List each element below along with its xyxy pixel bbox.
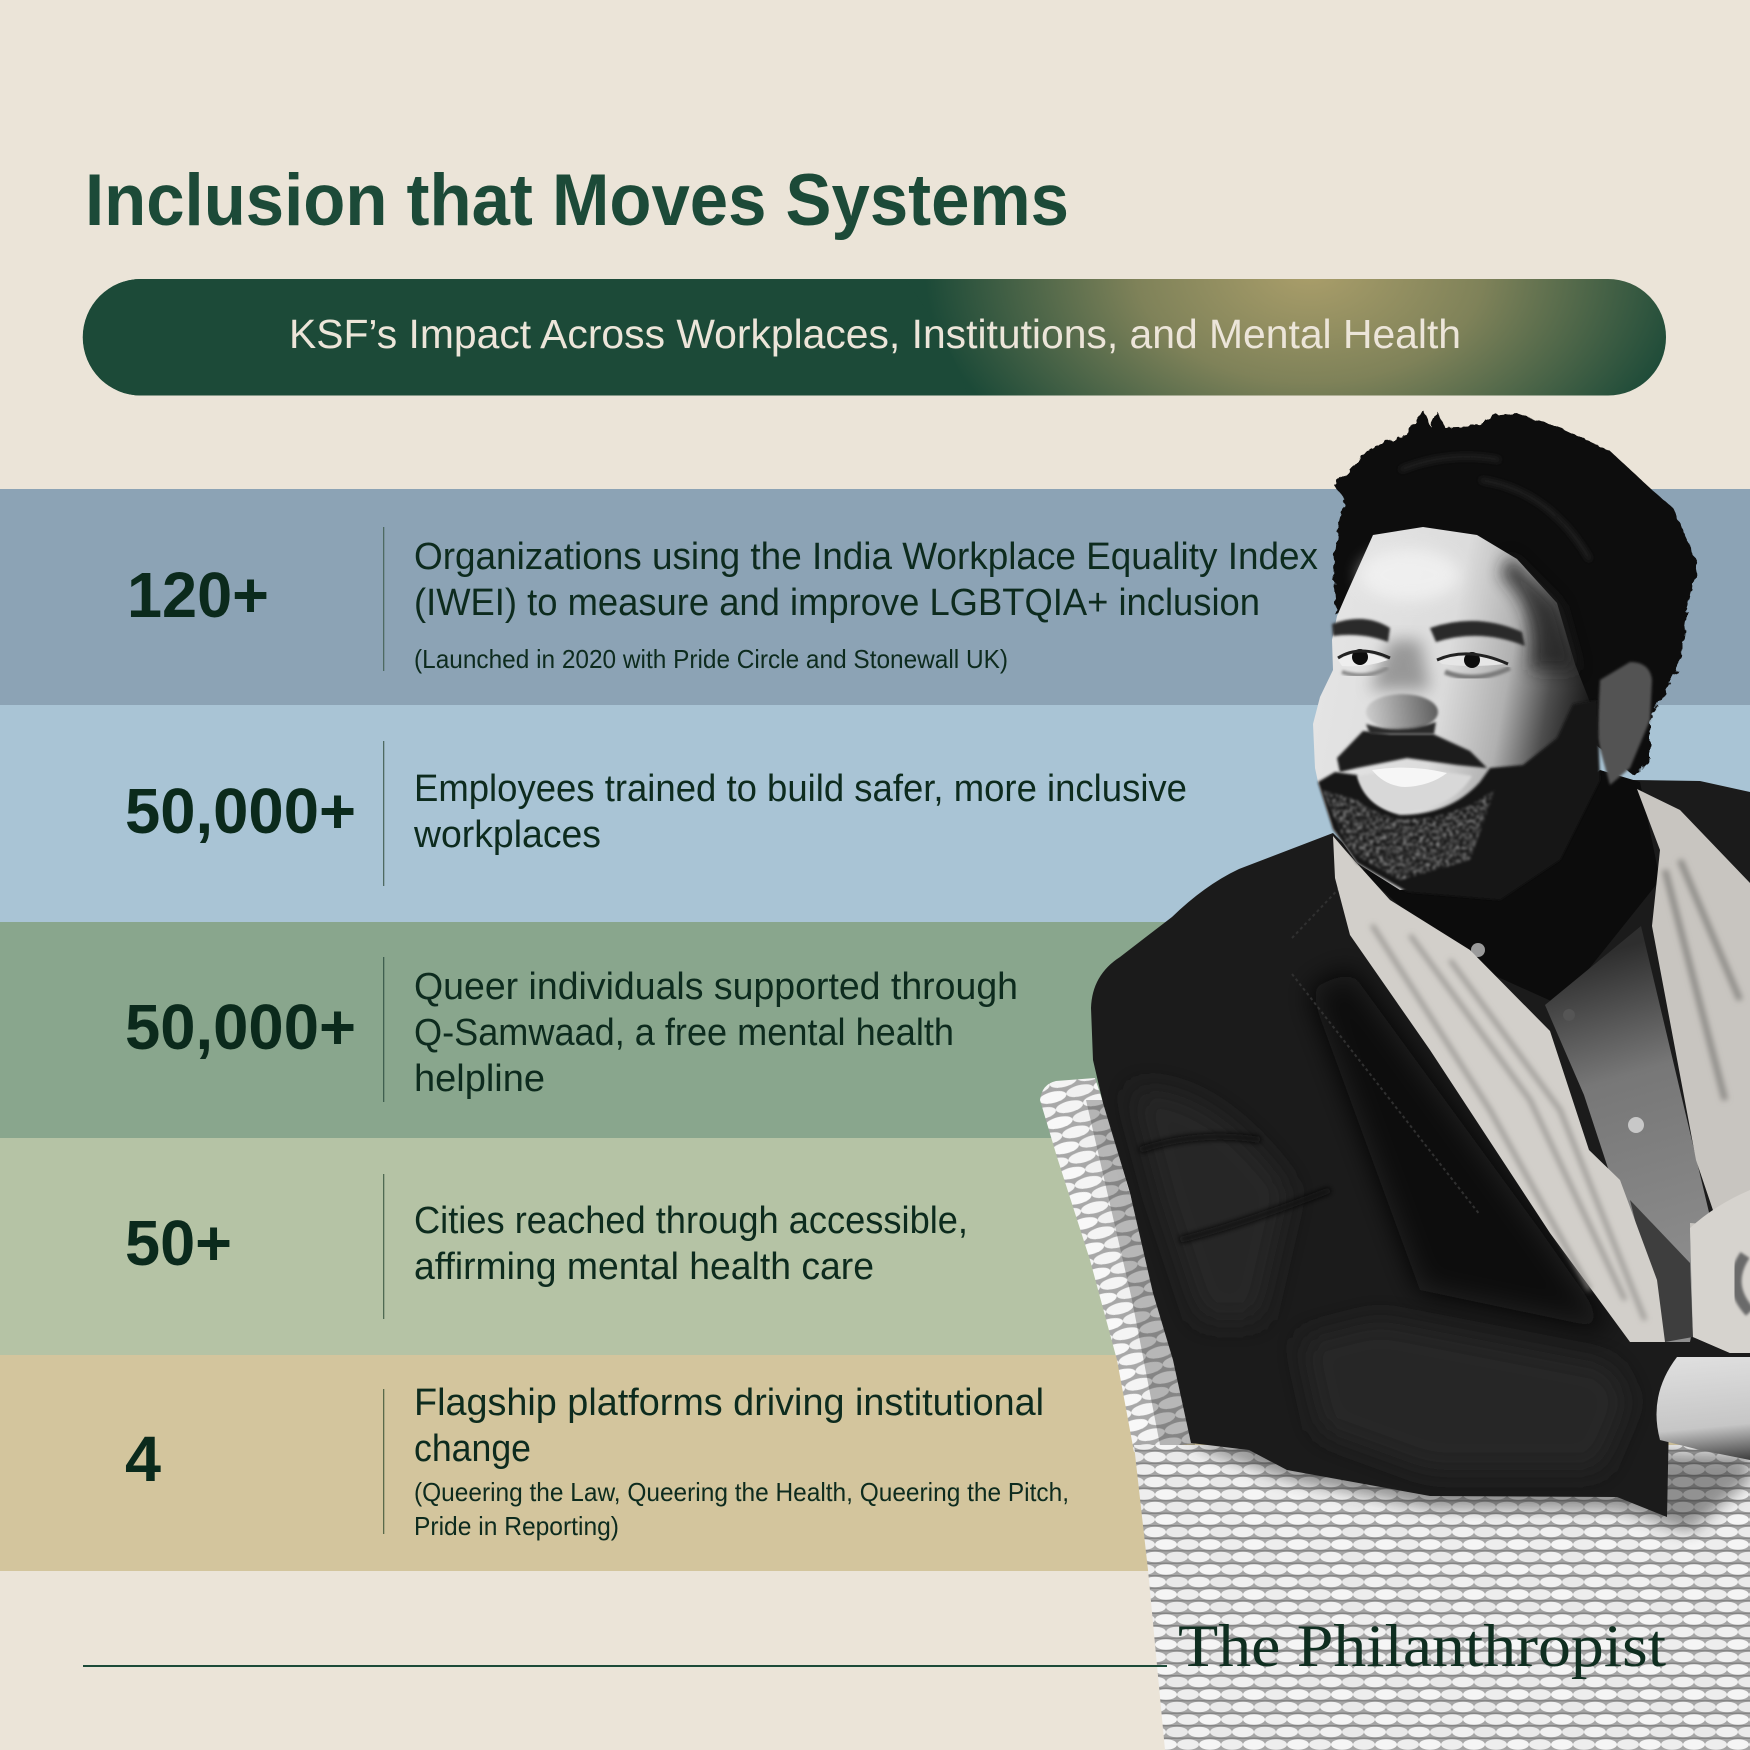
band: 4 flagship platforms bbox=[0, 1355, 1750, 1571]
teeth bbox=[1372, 768, 1447, 787]
chin skin bbox=[1358, 770, 1472, 812]
band: 50+ cities: affirming mental health care bbox=[414, 1246, 874, 1288]
band: 4 flagship platforms: change bbox=[414, 1428, 531, 1470]
eyebrow left bbox=[1332, 619, 1390, 642]
brand: The Philanthropist: The Philanthropist bbox=[1178, 1613, 1666, 1679]
portrait photo: man seated in wicker chair bbox=[1040, 410, 1750, 1750]
band: 4 flagship platforms: Flagship platforms driving institutional bbox=[414, 1382, 1044, 1424]
wicker chair bbox=[1040, 1078, 1750, 1750]
band: 50,000+ employees: 50,000+ bbox=[125, 775, 356, 847]
band: 50,000+ queer individuals: Queer individuals supported through bbox=[414, 966, 1018, 1008]
band: 4 flagship platforms: 4 bbox=[125, 1423, 161, 1495]
band: 50+ cities: 50+ bbox=[125, 1207, 232, 1279]
band: 50,000+ employees: workplaces bbox=[413, 814, 601, 856]
footer rule bbox=[83, 1665, 1167, 1667]
scarf bbox=[1333, 789, 1750, 1353]
eye right bbox=[1437, 652, 1510, 677]
shirt bbox=[1471, 926, 1712, 1342]
head bbox=[1313, 410, 1698, 900]
hair bbox=[1333, 410, 1698, 775]
jacket bbox=[1091, 780, 1750, 1517]
eye left bbox=[1338, 649, 1390, 675]
band: 50+ cities bbox=[0, 1138, 1750, 1355]
band: 50,000+ queer individuals bbox=[0, 922, 1750, 1138]
band: 50,000+ employees: Employees trained to build safer, more inclusive bbox=[414, 768, 1187, 810]
forehead highlight bbox=[1360, 549, 1460, 601]
ear bbox=[1597, 662, 1652, 785]
band: 120+ organizations: 120+ bbox=[127, 559, 269, 631]
neck and collar bbox=[1360, 770, 1660, 1005]
band: 120+ organizations: (Launched in 2020 with Pride Circle and Stonewall UK) bbox=[414, 644, 1008, 674]
band: 50,000+ employees bbox=[0, 705, 1750, 922]
face bbox=[1313, 527, 1597, 890]
band: 120+ organizations: Organizations using the India Workplace Equality Index bbox=[414, 536, 1318, 578]
nose bbox=[1366, 640, 1438, 734]
band: 4 flagship platforms: (Queering the Law, Queering the Health, Queering the Pitch, bbox=[414, 1477, 1069, 1507]
title: Inclusion that Moves Systems bbox=[85, 160, 1069, 241]
band: 50+ cities: Cities reached through accessible, bbox=[414, 1200, 968, 1242]
subtitle pill bbox=[83, 279, 1666, 396]
moustache bbox=[1337, 731, 1487, 772]
band: 50,000+ queer individuals: helpline bbox=[414, 1058, 545, 1100]
eyebrow right bbox=[1430, 621, 1525, 646]
beard bbox=[1318, 700, 1600, 900]
subtitle pill: KSF’s Impact Across Workplaces, Institutions, and Mental Health bbox=[289, 311, 1461, 357]
band: 120+ organizations: (IWEI) to measure and improve LGBTQIA+ inclusion bbox=[414, 582, 1260, 624]
band: 50,000+ queer individuals: Q-Samwaad, a free mental health bbox=[414, 1012, 954, 1054]
band: 4 flagship platforms: Pride in Reporting) bbox=[414, 1511, 619, 1541]
band: 50,000+ queer individuals: 50,000+ bbox=[125, 991, 356, 1063]
hairline shadow bbox=[1500, 555, 1578, 670]
hand bbox=[1656, 1357, 1750, 1460]
band: 120+ organizations bbox=[0, 489, 1750, 706]
